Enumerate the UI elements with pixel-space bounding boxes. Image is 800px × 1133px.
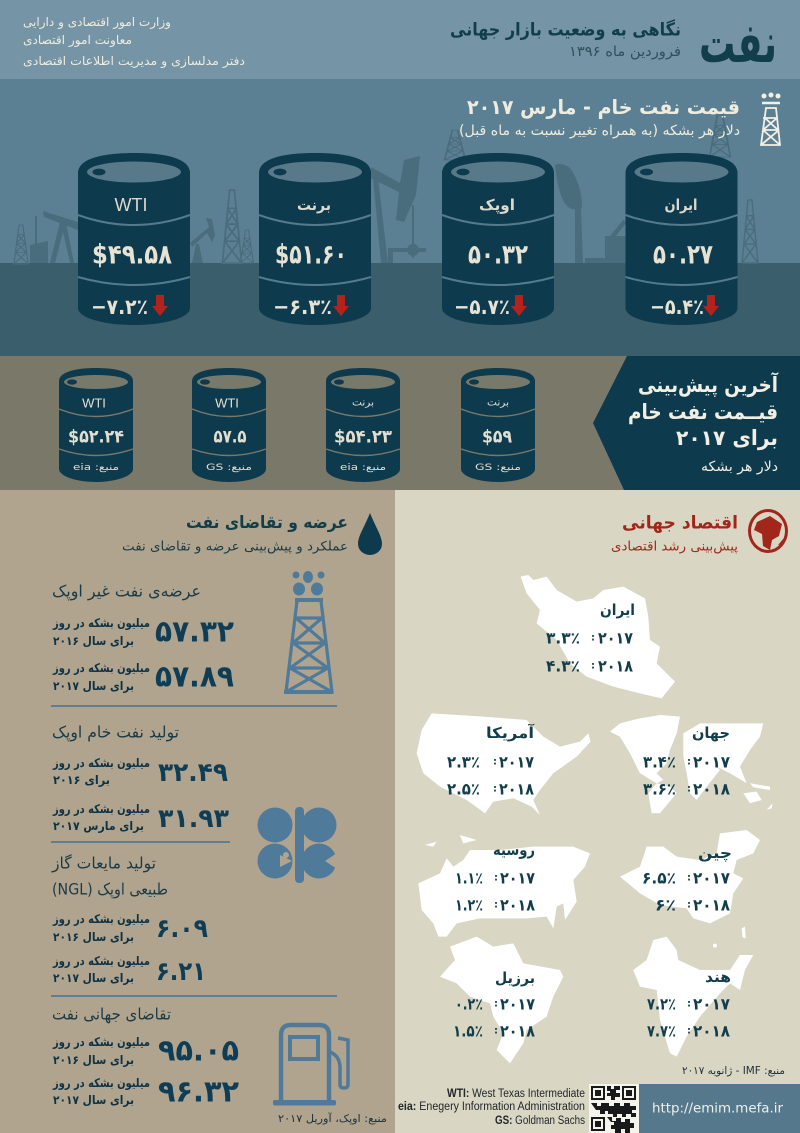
map panel: Brazil: ۲۰۱۷ (500, 994, 535, 1014)
map panel: World: جهان (692, 724, 730, 742)
map panel: Iran: ۲۰۱۷ (598, 628, 633, 648)
barrel: Brent: برنت (297, 196, 331, 214)
map panel: USA: ۲.۵٪ (447, 780, 480, 798)
abbreviations legend: GS: Goldman Sachs (495, 1115, 585, 1127)
source note: OPEC: منبع: اوپک، آوریل ۲۰۱۷ (278, 1112, 387, 1125)
barrel: WTI: $۴۹.۵۸ (92, 240, 172, 270)
map panel: Russia: روسیه (493, 841, 535, 859)
ministry credits (23, 15, 245, 69)
map panel: India: : (687, 1026, 691, 1036)
barrel: WTI: −۷.۲٪ (91, 295, 148, 319)
QR code (589, 1084, 639, 1133)
map panel: Iran: ۳.۳٪ (546, 628, 580, 648)
website URL bar: http://emim.mefa.ir (652, 1102, 784, 1116)
block: OPEC NGL production: برای سال ۲۰۱۶ (53, 930, 134, 944)
subheading: dollars per barrel: دلار هر بشکه (به همراه تغییر نسبت به ماه قبل) (459, 123, 740, 139)
map panel: World: ۲۰۱۸ (693, 780, 730, 798)
forecast heading: برای ۲۰۱۷ (676, 426, 778, 450)
map panel: India (633, 927, 753, 1057)
map panel: Brazil (440, 937, 563, 1063)
block: OPEC NGL production: ۶.۲۱ (156, 957, 206, 987)
barrel: OPEC: −۵.۷٪ (454, 295, 510, 319)
icon: globe (748, 509, 788, 553)
map panel: World: ۳.۴٪ (643, 752, 676, 772)
block: non-OPEC supply: برای سال ۲۰۱۷ (53, 679, 134, 693)
heading: global market: نگاهی به وضعیت بازار جهانی (450, 18, 681, 40)
divider (51, 705, 337, 707)
small barrel: WTI eia: $۵۲.۲۴ (68, 426, 124, 448)
block: OPEC crude production: میلیون بشکه در روز (52, 756, 150, 771)
block: world oil demand (52, 1004, 239, 1110)
heading: supply and demand: عرضه و تقاضای نفت (186, 513, 348, 533)
forecast heading: قیــمت نفت خام (628, 400, 778, 424)
small barrel: WTI eia (59, 368, 133, 482)
icon: fuel pump (273, 1025, 348, 1106)
map panel: Iran (521, 575, 675, 698)
map panel: Russia: ۱.۲٪ (455, 896, 483, 914)
barrel: OPEC: اوپک (479, 196, 515, 215)
map panel: Brazil: برزیل (495, 969, 535, 987)
forecast heading (628, 372, 779, 450)
block: non-OPEC supply: میلیون بشکه در روز (52, 616, 150, 631)
divider (51, 841, 230, 843)
background oil field silhouette (14, 115, 758, 264)
map panel: Iran: : (591, 632, 595, 644)
block: OPEC NGL production: طبیعی اوپک (NGL) (52, 880, 168, 900)
barrel: OPEC (442, 153, 554, 325)
map panel: USA (417, 713, 591, 815)
divider (51, 995, 337, 997)
date: فروردین ماه ۱۳۹۶ (569, 44, 681, 60)
block: OPEC NGL production: تولید مایعات گاز (51, 854, 156, 874)
ministry credits: دفتر مدلسازی و مدیریت اطلاعات اقتصادی (23, 54, 245, 69)
block: OPEC crude production: ۳۱.۹۳ (158, 804, 229, 834)
map panel: Russia: : (494, 872, 498, 884)
map panel: Russia: ۱.۱٪ (455, 868, 483, 888)
barrel: Brent: −۶.۳٪ (273, 295, 332, 319)
map panel: India: ۷.۷٪ (647, 1022, 676, 1040)
abbreviations legend: WTI: West Texas Intermediate (447, 1088, 585, 1100)
small barrel: Brent eia: $۵۴.۲۳ (334, 426, 392, 448)
map panel: Brazil: : (494, 998, 498, 1010)
map panel: India: ۲۰۱۸ (693, 1022, 730, 1040)
map panel: India: ۷.۲٪ (647, 994, 676, 1014)
map panel: USA: : (493, 756, 497, 768)
map panel: Iran: ۴.۳٪ (546, 656, 580, 676)
barrel: WTI: WTI (114, 195, 148, 215)
block: OPEC NGL production (51, 854, 208, 987)
block: OPEC NGL production: میلیون بشکه در روز (52, 954, 150, 969)
small barrel: Brent GS (461, 368, 535, 482)
small barrel: WTI GS (192, 368, 266, 482)
map panel: China: ۶٪ (655, 896, 676, 914)
map panel: Brazil: ۱.۵٪ (453, 1022, 483, 1040)
block: world oil demand: تقاضای جهانی نفت (52, 1004, 171, 1024)
small barrel: WTI eia: WTI (82, 396, 106, 410)
abbreviations legend: eia: Enegery Information Administration (398, 1101, 585, 1113)
heading: crude oil price: قیمت نفت خام - مارس ۲۰۱۷ (467, 95, 740, 119)
block: world oil demand: ۹۶.۳۲ (158, 1074, 239, 1110)
block: non-OPEC supply: عرضه‌ی نفت غیر اوپک (52, 582, 201, 602)
map panel: World: ۲۰۱۷ (693, 752, 730, 772)
ministry credits: معاونت امور اقتصادی (23, 33, 132, 48)
block: OPEC NGL production: برای سال ۲۰۱۷ (53, 971, 134, 985)
barrel: Iran: ایران (664, 196, 698, 214)
map panel: Iran: : (591, 660, 595, 672)
map panel: Russia (418, 835, 590, 937)
map panel: USA: ۲۰۱۸ (499, 780, 534, 798)
block: world oil demand: ۹۵.۰۵ (158, 1034, 239, 1068)
abbreviations legend (398, 1088, 585, 1127)
small barrel: WTI GS: ۵۷.۵ (214, 426, 247, 448)
block: OPEC crude production: ۳۲.۴۹ (158, 758, 228, 788)
forecast heading: آخرین پیش‌بینی (638, 372, 779, 397)
block: non-OPEC supply: برای سال ۲۰۱۶ (53, 634, 134, 648)
subheading: supply and demand: عملکرد و پیش‌بینی عرضه و تقاضای نفت (122, 540, 348, 554)
barrel: OPEC: ۵۰.۳۲ (468, 240, 528, 270)
icon: oil drop (358, 513, 382, 555)
small barrel: Brent eia: منبع: eia (340, 463, 386, 473)
icon: oil derrick white (761, 93, 780, 145)
block: world oil demand: برای سال ۲۰۱۶ (53, 1053, 134, 1067)
forecast band (0, 356, 800, 490)
map panel: Iran: ایران (600, 601, 635, 619)
forecast arrow panel (593, 356, 800, 490)
ministry credits: وزارت امور اقتصادی و دارایی (23, 15, 171, 30)
website URL bar (639, 1084, 800, 1133)
barrel: Brent: $۵۱.۶۰ (275, 240, 347, 270)
barrel: Iran: ۵۰.۲۷ (653, 240, 713, 270)
small barrel: Brent GS: $۵۹ (482, 426, 512, 448)
block: OPEC NGL production: میلیون بشکه در روز (52, 912, 150, 927)
map panel: China: چین (698, 844, 732, 863)
map panel: Brazil: ۲۰۱۸ (500, 1022, 535, 1040)
map panel: China (620, 830, 760, 923)
block: non-OPEC supply: میلیون بشکه در روز (52, 661, 150, 676)
small barrel: WTI GS: منبع: GS (206, 463, 252, 473)
icon: derrick with oil drops (284, 571, 333, 694)
block: OPEC NGL production: ۶.۰۹ (156, 914, 208, 944)
block: non-OPEC supply: ۵۷.۸۹ (155, 660, 234, 694)
small barrel: Brent GS: برنت (487, 398, 509, 408)
map panel: China: ۲۰۱۸ (693, 896, 730, 914)
small barrel: Brent eia: برنت (352, 398, 374, 408)
map panel: China: ۶.۵٪ (642, 868, 676, 888)
map panel: China: ۲۰۱۷ (693, 868, 730, 888)
barrel: WTI (78, 153, 190, 325)
map panel: Iran: ۲۰۱۸ (598, 656, 633, 676)
map panel: India: ۲۰۱۷ (693, 994, 730, 1014)
map panel: Russia: : (494, 900, 498, 910)
block: world oil demand: میلیون بشکه در روز (52, 1076, 150, 1091)
barrel: Iran: −۵.۴٪ (650, 295, 704, 319)
block: OPEC crude production: برای ۲۰۱۶ (53, 773, 110, 787)
map panel: USA: : (493, 784, 497, 794)
map panel: USA: آمریکا (486, 724, 535, 742)
map panel: World (610, 715, 773, 813)
panel: supply and demand background (0, 490, 395, 1133)
small barrel: Brent GS: منبع: GS (475, 463, 521, 473)
header band (0, 0, 800, 79)
block: world oil demand: میلیون بشکه در روز (52, 1035, 150, 1050)
map panel: World: : (687, 756, 691, 768)
subheading: economic growth forecast: پیش‌بینی رشد اقتصادی (611, 540, 738, 554)
map panel: USA: ۲.۳٪ (447, 752, 480, 772)
block: OPEC crude production: میلیون بشکه در روز (52, 802, 150, 817)
icon: OPEC logo (258, 807, 337, 883)
heading: world economy: اقتصاد جهانی (622, 512, 738, 534)
small barrel: Brent eia (326, 368, 400, 482)
block: OPEC crude production: تولید نفت خام اوپک (52, 722, 179, 742)
map panel: World: ۳.۶٪ (643, 780, 676, 798)
map panel: Brazil: : (494, 1026, 498, 1036)
barrel: Brent (259, 153, 371, 325)
block: OPEC crude production (52, 722, 229, 834)
block: non-OPEC supply: ۵۷.۳۲ (155, 614, 234, 650)
source note: IMF: منبع: IMF - ژانویه ۲۰۱۷ (682, 1065, 785, 1077)
map panel: Russia: ۲۰۱۸ (500, 896, 535, 914)
map panel: India: : (687, 998, 691, 1010)
main price band background (0, 79, 800, 356)
map panel: World: : (687, 784, 691, 794)
barrel: Iran (626, 153, 738, 325)
block: OPEC crude production: برای مارس ۲۰۱۷ (53, 819, 144, 833)
map panel: China: : (687, 900, 691, 910)
map panel: USA: ۲۰۱۷ (499, 752, 534, 772)
panel: world economy background (395, 490, 800, 1133)
map panel: China: : (687, 872, 691, 884)
map panel: India: هند (705, 968, 731, 986)
small barrel: WTI eia: منبع: eia (73, 463, 119, 473)
map panel: Russia: ۲۰۱۷ (500, 868, 535, 888)
small barrel: WTI GS: WTI (215, 396, 239, 410)
forecast unit: دلار هر بشکه (701, 459, 778, 475)
block: non-OPEC supply (52, 582, 234, 694)
map panel: Brazil: ۰.۲٪ (455, 994, 483, 1014)
block: world oil demand: برای سال ۲۰۱۷ (53, 1093, 134, 1107)
